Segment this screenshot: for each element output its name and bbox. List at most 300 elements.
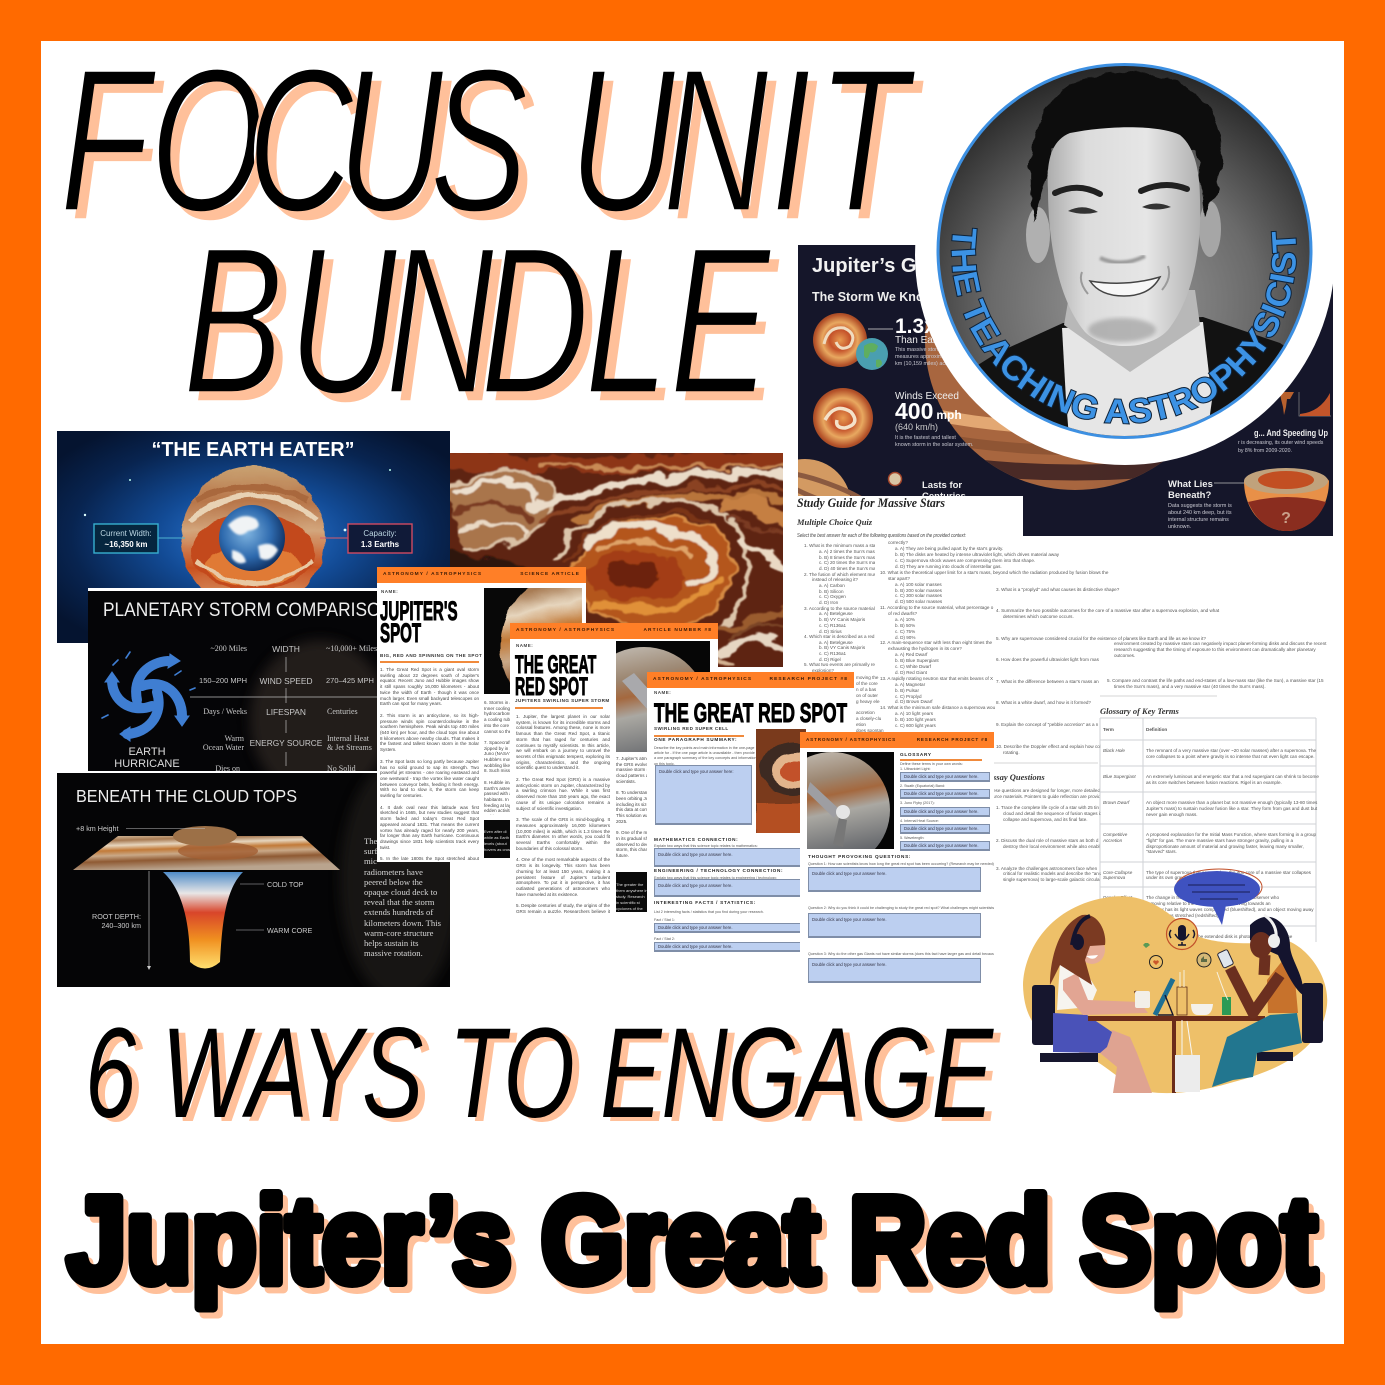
essay questions: destroy their local environment while also enabli xyxy=(1003,844,1101,849)
quiz column one: b. B) 8 times the Sun's mass xyxy=(819,555,878,560)
quiz column one: c. C) Oxygen xyxy=(819,594,846,599)
worksheet: Jupiter's Spot: ASTRONOMY / ASTROPHYSICS xyxy=(383,572,482,577)
quiz column one: c. C) 20 times the Sun's mass xyxy=(819,560,881,565)
study guide page xyxy=(797,496,1327,942)
fact: lifespan xyxy=(759,459,966,551)
icon: Earth xyxy=(219,505,285,571)
answer box: question two: Double click and type your answer here. xyxy=(812,917,886,922)
worksheet: Jupiter's Spot: 1. The Great Red Spot is a giant oval storm swirling about 22 degrees south of Jupiter's equator. Recent Juno and Hubble images show it still spans roughly 16,000 kilometers - about twice the width of Earth - though it was once much larger. Even small backyard telescopes on Earth can spot for many years. xyxy=(380,667,479,706)
worksheet: The Great Red Spot article: cyclones of the xyxy=(616,906,643,911)
worksheet: Jupiter's Spot: 8. Hubble ima xyxy=(484,780,512,785)
fact: what lies beneath: Beneath? xyxy=(1168,490,1211,501)
essay questions: 2. Discuss the dual role of massive stars as both d xyxy=(996,838,1099,843)
comparison table: LIFESPAN xyxy=(266,707,306,717)
image: Jupiter and spacecraft xyxy=(616,641,710,752)
worksheet: Jupiter's Spot: JUPITER'S xyxy=(380,596,458,626)
answer box: mathematics: Double click and type your answer here. xyxy=(658,852,732,857)
quiz column two: b. B) The disks are heated by intense ultraviolet light, which drives material away xyxy=(895,552,1060,557)
fact: size: This massive storm xyxy=(895,347,942,353)
quiz column two: d. D) 500 solar masses xyxy=(895,599,943,604)
label: Earth hurricane: EARTH xyxy=(128,746,166,758)
worksheet: The Great Red Spot article: RED SPOT xyxy=(515,673,588,701)
worksheet: Jupiter's Spot: 2. This storm is an anticyclone, so its high-pressure winds spin counterclockwise in the southern hemisphere. Peak winds top 400 miles (640 km) per hour, and the cloud tops rise about 8 kilometers above nearby clouds. That makes it the fastest and tallest known storm in the Solar System. xyxy=(380,713,479,752)
short answer questions: 5. Why are supernovae considered crucial for the existence of planets like Earth and life as we know it? xyxy=(996,636,1206,641)
comparison table: 270–425 MPH xyxy=(326,676,374,685)
worksheet: Jupiter's Spot: 8. Such missio xyxy=(484,768,514,773)
worksheet: Jupiter's Spot: Juno (NASA's xyxy=(484,751,512,756)
glossary table: Supernova xyxy=(1103,875,1126,880)
short answer questions: rotating. xyxy=(1003,750,1020,755)
glossary table: Jupiter's mass) to sustain nuclear fusion like a star. They form from gas and dust but xyxy=(1146,806,1318,811)
quiz column two: a. A) 10% xyxy=(895,617,915,622)
essay questions continued: times the Sun's mass), and a very massive star (40 times the Sun's mass). xyxy=(1114,684,1266,689)
quiz column two: d. D) They are running into clouds of interstellar gas. xyxy=(895,564,1002,569)
worksheet: Jupiter's Spot: BIG, RED AND SPINNING ON THE SPOT xyxy=(380,653,482,658)
heading: multiple choice quiz: Multiple Choice Quiz xyxy=(797,517,873,527)
quiz column two: 14. What is the minimum safe distance a supernova wou xyxy=(880,705,996,710)
worksheet: The Great Red Spot article: scientists. xyxy=(616,779,636,784)
image: Jupiter close-up xyxy=(484,588,582,694)
comparison table: Centuries xyxy=(327,707,358,716)
short answer questions: 3. What is a "proplyd" and what causes its distinctive shape? xyxy=(996,587,1120,592)
comparison table: Days / Weeks xyxy=(203,707,247,716)
quiz column one: 1. What is the minimum mass a star xyxy=(804,543,877,548)
suit xyxy=(978,317,1284,436)
icon: thumbs up xyxy=(1197,953,1211,967)
body text: peered below the xyxy=(364,877,423,887)
worksheet: research project summary: ENGINEERING / TECHNOLOGY CONNECTION: xyxy=(654,868,783,873)
photo xyxy=(930,60,1320,450)
headline: 6 ways to engage: 6 WAYS TO ENGAGE xyxy=(85,1002,994,1145)
worksheet: research project summary: INTERESTING FACTS / STATISTICS: xyxy=(654,900,756,905)
short answer questions: 10. Describe the Doppler effect and explain how col xyxy=(996,744,1101,749)
fact: size: km (10,159 miles) across xyxy=(895,361,956,367)
quiz column one: 5. What two events are primarily res xyxy=(804,662,878,667)
essay questions continued: 5. Compare and contrast the life paths and end-states of a low-mass star (like the Sun), a massive star (15 xyxy=(1107,678,1324,683)
glossary table: Black Hole xyxy=(1103,748,1125,753)
labels: WARM CORE xyxy=(267,926,312,935)
glossary table: The type of supernova that occurs when the iron core of a massive star collapses xyxy=(1146,870,1312,875)
quiz column two: a. A) Magnetar xyxy=(895,682,926,687)
slide: Beneath the Cloud Tops xyxy=(57,773,450,987)
essay questions continued: research suggesting that the timing of exposure to this environment can dramatically alter planetary xyxy=(1114,647,1316,652)
heading: The Earth Eater: “THE EARTH EATER” xyxy=(152,439,354,461)
essay questions xyxy=(993,788,1102,882)
body text: kilometers down. This xyxy=(364,918,442,928)
glossary table: Blue Supergiant xyxy=(1103,774,1136,779)
quiz column two: c. C) 600 light years xyxy=(895,723,937,728)
answer box: glossary one xyxy=(900,772,990,782)
fact: shrinking and speeding up: r is decreasing, its outer wind speeds xyxy=(1238,440,1324,446)
worksheet: Jupiter's Spot: SCIENCE ARTICLE xyxy=(520,572,580,577)
quiz column one: b. B) Silicon xyxy=(819,589,844,594)
answer box: summary xyxy=(655,765,752,825)
answer box: question two xyxy=(808,913,981,938)
fact: what lies beneath: unknown. xyxy=(1168,524,1191,530)
glossary table: An object more massive than a planet but not massive enough (typically 13-80 times xyxy=(1146,800,1318,805)
quiz column two: b. B) Blue Supergiant xyxy=(895,658,939,663)
fact: shrinking and speeding up xyxy=(1238,392,1331,454)
glossary table: "fight" for gas. The more massive stars have stronger gravity, pulling in a xyxy=(1146,838,1294,843)
worksheet: Jupiter's Spot: hydrocarbons xyxy=(484,711,512,716)
worksheet: research project summary: article for - If the one page article is unavailable - then provide xyxy=(654,751,755,755)
answer box: engineering xyxy=(654,879,854,897)
answer box: question one xyxy=(808,867,981,892)
quiz column one: a. A) Betelgeuse xyxy=(819,640,853,645)
worksheet: research project summary: a one paragraph summary of the key concepts and information xyxy=(654,756,756,760)
answer box: summary: Double click and type your answer here: xyxy=(659,769,733,774)
worksheet: Jupiter's Spot: Even after di xyxy=(484,829,506,834)
worksheet: research project summary: RESEARCH PROJECT #8 xyxy=(770,677,848,682)
answer box: glossary two xyxy=(900,789,990,799)
glossary table: Doppler Effect xyxy=(1103,895,1133,900)
fact: shrinking and speeding up: by 8% from 2009-2020. xyxy=(1238,448,1292,454)
worksheet: The Great Red Spot article: 2. The Great Red Spot (GRS) is a massive anticyclonic storm on Jupiter, characterized by a swirling crimson hue. While it was first observed more than 150 years ago, the exact cause of its unique coloration remains a subject of scientific investigation. xyxy=(516,777,610,811)
worksheet: research project summary: Explain two ways that this science topic relates to engineering / technology: xyxy=(654,876,777,880)
body text: radiometers have xyxy=(364,867,423,877)
icon: hurricane xyxy=(102,652,195,741)
quiz column two: c. C) Supernova shock waves are compressing them into that shape. xyxy=(895,558,1035,563)
short answer questions: 4. Summarize the two possible outcomes for the core of a massive star after a supernova explosion, and what xyxy=(996,608,1220,613)
callout: capacity: Capacity: xyxy=(363,529,397,538)
worksheet: glossary and questions: Question 1: How can scientists know how long the great red spot has been occurring? (Research may be needed) xyxy=(808,862,994,866)
fact: what lies beneath: Data suggests the storm is xyxy=(1168,503,1232,509)
fact: what lies beneath: ? xyxy=(1281,510,1291,527)
answer box: glossary three: Double click and type your answer here. xyxy=(904,809,978,814)
quiz column two: c. C) 300 solar masses xyxy=(895,593,943,598)
glossary table: An extremely luminous and energetic star that a red supergiant can shrink to become xyxy=(1146,774,1319,779)
worksheet: glossary and questions xyxy=(800,732,994,984)
short answer questions: 6. How does the powerful ultraviolet light from mas xyxy=(996,657,1100,662)
quiz column two: of red dwarfs? xyxy=(888,611,918,616)
short answer questions xyxy=(996,587,1220,755)
comparison table: Internal Heat xyxy=(327,734,370,743)
worksheet: Jupiter's Spot: cannot so the xyxy=(484,729,511,734)
callout: current width: ~16,350 km xyxy=(105,540,147,549)
essay questions: collapse and supernova, and its final fate. xyxy=(1003,817,1088,822)
essay questions: 3. Analyze the challenges astronomers face when xyxy=(996,866,1098,871)
main title: Bundle: BUNDLE xyxy=(183,202,772,438)
eyebrows xyxy=(1055,185,1187,194)
fact: size: 1.3x xyxy=(895,315,936,338)
heading: essay questions: ssay Questions xyxy=(992,772,1045,782)
glossary table: under its own gravity. xyxy=(1146,875,1189,880)
answer box: fact two xyxy=(654,942,854,952)
body text: opaque cloud deck to xyxy=(364,887,437,897)
worksheet: Jupiter's Spot: zipped by in 1 xyxy=(484,746,512,751)
labels xyxy=(76,824,312,970)
worksheet: The Great Red Spot article: The greater the xyxy=(616,882,643,887)
quiz column one: 2. The fusion of which element must xyxy=(804,572,878,577)
worksheet: glossary and questions: ASTRONOMY / ASTROPHYSICS xyxy=(806,737,896,742)
quiz column one: instead of releasing it? xyxy=(812,577,858,582)
quiz column one: d. D) Rigel xyxy=(819,657,841,662)
infographic: Jupiter's Great Red Spot xyxy=(798,245,1333,536)
body text: mic xyxy=(364,856,377,866)
fact: winds: 400mph xyxy=(895,398,962,424)
fact: size: measures approximately xyxy=(895,354,954,360)
worksheet: Jupiter's Spot: habitants. In t xyxy=(484,797,511,802)
quiz column one xyxy=(804,543,884,733)
glossary table: Brown Dwarf xyxy=(1103,800,1130,805)
quiz column two: a. A) Red Dwarf xyxy=(895,652,928,657)
essay questions continued xyxy=(1107,641,1327,689)
worksheet: The Great Red Spot article: JUPITERS SWIRLING SUPER STORM xyxy=(515,698,610,703)
answer box: question three xyxy=(808,958,981,983)
icon: heart xyxy=(1143,943,1162,968)
worksheet: Jupiter's Spot: SPOT xyxy=(380,618,421,648)
body text: surf xyxy=(364,846,378,856)
label: Earth hurricane: HURRICANE xyxy=(114,758,180,770)
worksheet: Jupiter's Spot: a cooling rubbl xyxy=(484,717,514,722)
worksheet: The Great Red Spot article: THE GREAT xyxy=(515,651,596,679)
labels: COLD TOP xyxy=(267,880,304,889)
worksheet: Jupiter's Spot: 7. Spacecraft b xyxy=(484,740,514,745)
quiz column two: a. A) They are being pulled apart by the star's gravity. xyxy=(895,546,1003,551)
answer box: fact two: Double click and type your answer here. xyxy=(658,944,732,949)
worksheet: Jupiter's Spot: passed with a xyxy=(484,791,512,796)
worksheet: research project summary: List 2 interesting facts / statistics that you find during your research. xyxy=(654,910,764,914)
worksheet: The Great Red Spot article: ASTRONOMY / ASTROPHYSICS xyxy=(516,628,615,633)
quiz column two: 12. A main-sequence star with less than eight times the xyxy=(880,640,993,645)
quiz column one: c. C) R136a1 xyxy=(819,651,847,656)
worksheet: research project summary: ASTRONOMY / ASTROPHYSICS xyxy=(653,677,752,682)
answer box: glossary two: Double click and type your answer here. xyxy=(904,791,978,796)
person: left woman with headphones xyxy=(1032,915,1152,1093)
quiz column one: c. C) R136a1 xyxy=(819,623,847,628)
quiz column one: d. D) Sirius xyxy=(819,629,842,634)
callout: current width xyxy=(94,524,158,553)
worksheet: research project summary: Describe the key points and main information in the one-page xyxy=(654,746,754,750)
worksheet: Jupiter's Spot: edden activiti xyxy=(484,808,511,813)
comparison table: & Jet Streams xyxy=(327,743,372,752)
quiz column one: 4. Which star is described as a red xyxy=(804,634,875,639)
quiz column two: c. C) White Dwarf xyxy=(895,664,932,669)
quiz column one: a. A) Betelgeuse xyxy=(819,611,853,616)
worksheet: Jupiter's Spot: Earth's asteroi xyxy=(484,786,513,791)
icon: microphone xyxy=(1166,918,1198,950)
main title: Focus Unit: FOCUS UNIT xyxy=(60,25,916,255)
answer box: fact one: Double click and type your answer here. xyxy=(658,925,732,930)
essay questions: single supernova) to large-scale galactic circula xyxy=(1003,877,1100,882)
short answer questions: 7. What is the difference between a star's mass an xyxy=(996,679,1099,684)
fact: lifespan: Lasts for xyxy=(922,480,962,491)
face xyxy=(1048,127,1200,346)
eyes xyxy=(1068,204,1171,214)
headline: 6 ways to engage: 6 WAYS TO ENGAGE xyxy=(92,1006,1001,1149)
quiz column one: d. D) Iron xyxy=(819,600,839,605)
glossary table: has its waves stretched (redshifted). xyxy=(1146,913,1220,918)
body text xyxy=(364,836,442,958)
glossary table: observer has its light waves compressed (blueshifted), and an object moving away xyxy=(1146,907,1314,912)
body text: reveal that the storm xyxy=(364,897,435,907)
glossary table: The remnant of a very massive star (over ~20 solar masses) after a supernova. The xyxy=(1146,748,1317,753)
heading: BENEATH THE CLOUD TOPS xyxy=(76,786,297,806)
worksheet: Jupiter's Spot: 6. Storms in a xyxy=(484,700,512,705)
answer box: glossary three xyxy=(900,807,990,817)
storm root funnel xyxy=(163,872,243,968)
quiz column one: moving the xyxy=(856,675,879,680)
glossary table: A proposed explanation for the Initial Mass Function, where stars forming in a group xyxy=(1146,832,1317,837)
worksheet: The Great Red Spot article: 4. One of the most remarkable aspects of the GRS is its longevity. This storm has been churning for at least 150 years, making it a persistent feature of Jupiter's turbulent atmosphere. To put it in perspective, it has outlasted generations of astronomers who have marveled at its existence. xyxy=(516,857,610,897)
quiz column two: star apart? xyxy=(888,576,910,581)
comparison table: ~10,000+ Miles xyxy=(326,644,377,653)
glossary table: Proplyd: a nebula where the extended disk is photoevaporating from the xyxy=(1146,934,1293,939)
quiz column two: 11. According to the source material, what percentage o xyxy=(880,605,994,610)
fact: lifespan: Centuries xyxy=(922,491,966,502)
quiz column two: d. D) Red Giant xyxy=(895,670,928,675)
quiz column two: b. B) 100 light years xyxy=(895,717,937,722)
illustration: two people listening to a podcast xyxy=(1023,868,1328,1094)
short answer questions: 8. What is a white dwarf, and how is it formed? xyxy=(996,700,1091,705)
heading: Jupiter’s Great Red Spot xyxy=(812,255,1047,277)
fact: winds xyxy=(813,388,974,448)
answer box: question three: Double click and type your answer here. xyxy=(812,962,886,967)
labels: +8 km Height xyxy=(76,824,119,833)
glossary table: "starved" stars. xyxy=(1146,849,1177,854)
body text: warm-core structure xyxy=(364,928,434,938)
worksheet: research project summary: Fact / Stat 1: xyxy=(654,918,675,922)
body text: massive rotation. xyxy=(364,948,423,958)
worksheet: Jupiter's Spot: 3. The Spot lasts so long partly because Jupiter has no solid ground to sap its strength. Two powerful jet streams - one roaring eastward and one westward - trap the vortex like water caught between conveyor belts, feeding it fresh energy. With no land to slow it, the storm can keep swirling for centuries. xyxy=(380,759,479,798)
glossary table: Term xyxy=(1103,727,1114,732)
worksheet: Jupiter's Spot xyxy=(377,567,586,862)
glossary table: is moving relative to the source. An object moving towards an xyxy=(1146,901,1271,906)
callout: current width: Current Width: xyxy=(100,529,152,538)
slide: Planetary Storm Comparison xyxy=(88,588,388,771)
nose xyxy=(1100,256,1145,263)
worksheet: research project summary: SWIRLING RED SUPER CELL xyxy=(654,726,729,731)
quiz column one: etion xyxy=(856,722,866,727)
worksheet: The Great Red Spot article: 3. The scale of the GRS is mind-boggling. It measures approximately 16,000 kilometers (10,000 miles) in width, which is 1.3 times the Earth's diameter. In other words, you could fit several Earths comfortably within the boundaries of this colossal storm. xyxy=(516,817,610,851)
worksheet: Jupiter's Spot: wobbling like j xyxy=(484,763,512,768)
worksheet: The Great Red Spot article: future. xyxy=(616,853,629,858)
comparison table: ~200 Miles xyxy=(210,644,247,653)
worksheet: glossary and questions: Define these terms in your own words: xyxy=(900,762,963,766)
worksheet: research project summary: on this topic. xyxy=(654,762,675,766)
essay questions: cloud and detail the sequence of fusion stages it xyxy=(1003,811,1102,816)
essay questions: ese questions are designed for longer, more detailed xyxy=(993,788,1100,793)
quiz column two: d. D) Brown Dwarf xyxy=(895,699,933,704)
speech bubble xyxy=(1174,869,1262,925)
labels: 240–300 km xyxy=(101,921,141,930)
answer box: glossary five xyxy=(900,841,990,851)
essay questions continued: outcomes. xyxy=(1114,653,1135,658)
table with items xyxy=(1088,970,1265,1093)
worksheet: glossary and questions: GLOSSARY xyxy=(900,752,932,757)
fact: size xyxy=(813,313,956,370)
quiz column two: a. A) 10 light years xyxy=(895,711,934,716)
body text: extends hundreds of xyxy=(364,907,433,917)
labels: ROOT DEPTH: xyxy=(92,912,141,921)
worksheet: The Great Red Spot article: 1. Jupiter, the largest planet in our solar system, is known for its incredible storms and colossal features. Among these, none is more famous than the Great Red Spot, a titanic storm that has raged for centuries and continues to mystify scientists. In this article, we will embark on a journey to unravel the secrets of this enigmatic tempest, exploring its origins, characteristics, and the ongoing scientific quest to understand it. xyxy=(516,714,610,770)
fact: winds: (640 km/h) xyxy=(895,422,938,432)
glossary table: disproportionate amount of material and growing faster, leaving many smaller, xyxy=(1146,844,1304,849)
presenter photo badge xyxy=(915,63,1333,465)
callout: capacity: 1.3 Earths xyxy=(361,540,400,549)
glossary table: Competitive xyxy=(1103,832,1128,837)
curved brand text: THE TEACHING ASTROPHYSICIST xyxy=(950,228,1297,424)
glossary table: core collapses to a point where gravity is so intense that not even light can escape. xyxy=(1146,754,1315,759)
quiz column one: a. A) Carbon xyxy=(819,583,845,588)
worksheet: research project summary: ONE PARAGRAPH SUMMARY: xyxy=(654,737,737,742)
glossary table: Accretion xyxy=(1102,838,1123,843)
essay questions: critical for realistic models and describe the "ans xyxy=(1003,871,1102,876)
worksheet: glossary and questions: 3. Juno Flyby (2017): xyxy=(900,801,935,805)
worksheet: Jupiter's Spot: levels (about xyxy=(484,841,507,846)
worksheet: Jupiter's Spot: NAME: xyxy=(381,589,398,594)
quiz column one: b. B) VY Canis Majoris xyxy=(819,617,866,622)
worksheet: research project summary: THE GREAT RED SPOT xyxy=(654,698,847,728)
worksheet: The Great Red Spot article xyxy=(510,623,718,913)
worksheet: research project summary: MATHEMATICS CONNECTION: xyxy=(654,837,738,842)
swirling red spot behind Earth xyxy=(181,466,325,610)
comparison table: Warm xyxy=(225,734,245,743)
body text: helps sustain its xyxy=(364,938,419,948)
image: red spot close-up xyxy=(450,453,783,667)
comparison table: ENERGY SOURCE xyxy=(250,738,323,748)
worksheet: research project summary: NAME: xyxy=(654,690,671,695)
quiz column one: a closely-clu xyxy=(856,716,882,721)
quiz column two: exhausting the hydrogen in its core? xyxy=(888,646,962,651)
glossary table xyxy=(1100,718,1319,942)
fact: what lies beneath: What Lies xyxy=(1168,479,1213,490)
quiz column two: 13. A rapidly rotating neutron star that emits beams of X xyxy=(880,676,993,681)
main title: Focus Unit: FOCUS UNIT xyxy=(69,34,925,264)
study guide page: Select the best answer for each of the following questions based on the provided context: xyxy=(797,533,967,539)
comparison table: 150–200 MPH xyxy=(199,676,247,685)
quiz column one: explosion? xyxy=(812,668,834,673)
shirt xyxy=(1062,322,1212,436)
quiz column one: a. A) 2 times the Sun's mass xyxy=(819,549,878,554)
essay questions: 1. Trace the complete life cycle of a star with 25 tin xyxy=(996,805,1099,810)
hair xyxy=(1030,72,1223,222)
quiz column two: b. B) Pulsar xyxy=(895,688,919,693)
quiz column two xyxy=(880,540,1109,728)
worksheet: glossary and questions: THOUGHT PROVOKING QUESTIONS: xyxy=(808,854,911,859)
fact: winds: It is the fastest and tallest xyxy=(895,435,956,441)
worksheet: Jupiter's Spot: Hubble's mosa xyxy=(484,757,514,762)
answer box: glossary one: Double click and type your answer here. xyxy=(904,774,978,779)
quiz column one: accretion xyxy=(856,710,875,715)
worksheet: Jupiter's Spot: hovers as cros xyxy=(484,847,510,852)
worksheet: research project summary: Fact / Stat 2: xyxy=(654,937,675,941)
callout: capacity xyxy=(348,524,412,553)
worksheet: glossary and questions: 5. Wavelength: xyxy=(900,836,924,840)
worksheet: research project summary: Explain two ways that this science topic relates to mathematics: xyxy=(654,844,758,848)
glossary table: as its core switches between fusion reactions. Rigel is an example. xyxy=(1146,780,1282,785)
neck xyxy=(1064,290,1200,372)
worksheet: The Great Red Spot article: in scientific st xyxy=(616,900,640,905)
fact: size: Than Earth xyxy=(895,335,944,346)
worksheet: The Great Red Spot article: them anywhere in xyxy=(616,888,648,893)
fact: what lies beneath: about 240 km deep, but its xyxy=(1168,510,1232,516)
quiz column one: does spontan xyxy=(856,728,884,733)
glossary table: The change in frequency of a wave in relation to an observer who xyxy=(1146,895,1279,900)
worksheet: glossary and questions: 2. Swath (Equatorial) Band: xyxy=(900,784,945,788)
comparison table: WIDTH xyxy=(272,644,300,654)
worksheet: Jupiter's Spot: into the core a xyxy=(484,723,513,728)
answer box: mathematics xyxy=(654,848,854,867)
essay questions: urce materials. Pointers to guide reflection are provid xyxy=(993,794,1101,799)
quiz column one: 3. According to the source material, xyxy=(804,606,876,611)
fact: what lies beneath xyxy=(1168,468,1329,531)
answer box: fact one xyxy=(654,923,854,933)
quiz column two: c. C) Proplyd xyxy=(895,694,922,699)
slide: The Earth Eater xyxy=(57,431,450,643)
answer box: glossary four xyxy=(900,824,990,834)
ears xyxy=(1026,207,1050,263)
